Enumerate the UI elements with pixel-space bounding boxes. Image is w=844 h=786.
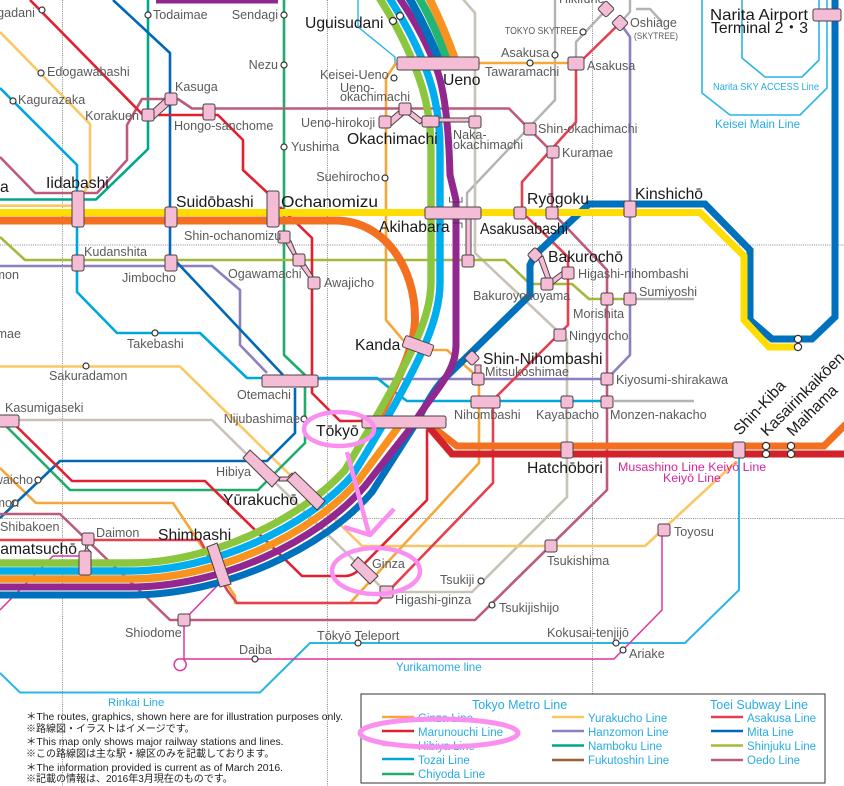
Akihabara connector ticks — [450, 197, 462, 228]
curved bundle: Tsukuba purple — [0, 0, 456, 587]
small station labels: okachimachi — [453, 138, 523, 152]
coloured line names: Yurikamome line — [396, 661, 482, 674]
small station labels: Tsukiji — [440, 573, 474, 587]
small station labels: Keisei-Ueno — [320, 68, 389, 82]
small station labels: Sakuradamon — [49, 369, 127, 383]
hand-drawn highlight: Marunouchi legend circle — [360, 719, 518, 747]
small station labels: Oshiage — [630, 16, 677, 30]
line: Ginza — [0, 63, 576, 603]
major station labels: Ueno — [443, 72, 481, 89]
small station labels: Kuramae — [562, 146, 613, 160]
major station labels: Akihabara — [379, 219, 450, 236]
coloured line names: Keisei Main Line — [715, 118, 800, 131]
line: Yurikamome — [0, 530, 662, 671]
major station labels: Yūrakuchō — [223, 492, 298, 509]
line: Asakusa — [0, 23, 620, 603]
small station labels: Daimon — [96, 526, 139, 540]
major station labels — [0, 7, 844, 558]
small station labels: Higashi-ginza — [395, 593, 471, 607]
line: Tozai — [0, 88, 607, 401]
legend labels: Ginza Line — [418, 713, 473, 725]
disclaimer notes — [26, 712, 343, 785]
small station labels: Ariake — [629, 647, 665, 661]
hand-drawn highlight: Tokyo circle — [304, 412, 374, 446]
major station labels: Tōkyō — [316, 423, 359, 440]
major station labels: Okachimachi — [347, 131, 438, 148]
major station labels: Kinshichō — [635, 186, 703, 203]
small station labels: Ginza — [372, 557, 405, 571]
small station labels: okachimachi — [340, 90, 410, 104]
line: Keisei Main outer loop — [702, 0, 827, 115]
coloured line names — [108, 81, 819, 709]
small station labels: Tsukishima — [547, 554, 609, 568]
small station labels: Naka- — [453, 128, 487, 142]
legend labels: Hibiya Line — [418, 741, 475, 753]
major station labels: Shimbashi — [158, 527, 231, 544]
small station labels: Nezu — [249, 58, 278, 72]
minor station circles — [10, 7, 802, 662]
small station labels: Hongo-sanchome — [174, 119, 273, 133]
line: Hanzomon — [0, 23, 630, 379]
line: Keiyo red — [427, 425, 844, 454]
line: Chuo orange — [0, 220, 415, 420]
major station labels: Shin-Kiba — [730, 377, 790, 439]
major station labels: a — [0, 179, 9, 196]
small station labels: Bakuroyokoyama — [473, 289, 570, 303]
station markers — [0, 1, 841, 626]
line: Hibiya — [10, 0, 567, 592]
legend labels: Marunouchi Line — [418, 727, 503, 739]
coloured line names: Musashino Line Keiyō Line — [618, 460, 766, 474]
small station labels: Nihombashi — [454, 408, 520, 422]
line: Marunouchi — [5, 0, 427, 576]
small station labels: Ueno- — [340, 81, 374, 95]
small station labels: Yushima — [291, 140, 339, 154]
line: Shinjuku — [0, 237, 630, 299]
top purple bar — [156, 0, 278, 4]
north bundle: orange — [428, 0, 456, 62]
small station labels: Kiyosumi-shirakawa — [616, 373, 728, 387]
coloured line names: Keiyō Line — [663, 471, 721, 485]
legend panel — [361, 694, 825, 783]
legend labels: Fukutoshin Line — [588, 755, 669, 767]
legend labels: Namboku Line — [588, 741, 662, 753]
small station labels: Tōkyō Teleport — [317, 629, 400, 643]
small station labels: Korakuen — [85, 109, 139, 123]
north bundle: blue — [408, 0, 440, 62]
line: Musashino orange — [434, 424, 844, 446]
small station labels — [0, 0, 728, 661]
legend labels: Hanzomon Line — [588, 727, 669, 739]
major station labels: Iidabashi — [46, 175, 109, 192]
hand-drawn arrow: Tokyo to Ginza — [344, 452, 394, 535]
legend labels: Shinjuku Line — [747, 741, 816, 753]
small station labels: Otemachi — [237, 388, 291, 402]
disclaimer notes: ※記載の情報は、2016年3月現在のものです。 — [26, 772, 233, 785]
station links — [84, 94, 566, 552]
legend labels: Oedo Line — [747, 755, 800, 767]
legend labels: Yurakucho Line — [588, 713, 667, 725]
major station labels: Kanda — [355, 337, 401, 354]
small station labels: Tawaramachi — [485, 65, 559, 79]
small station labels: Awajicho — [324, 276, 374, 290]
line: Keisei Skyliner link — [358, 0, 395, 66]
legend labels: Chiyoda Line — [418, 769, 485, 781]
major station labels: Ochanomizu — [281, 194, 378, 211]
major station labels: Hatchōbori — [527, 460, 603, 477]
legend labels: Tozai Line — [418, 755, 470, 767]
major station labels: Shin-Nihombashi — [483, 351, 602, 368]
line: Narita Sky Access inner loop — [742, 0, 819, 77]
hand-drawn highlight: Ginza circle — [332, 548, 420, 594]
small station labels: Sumiyoshi — [639, 285, 697, 299]
small station labels: Ueno-hirokoji — [301, 116, 375, 130]
small station labels: Hibiya — [216, 465, 251, 479]
major station labels: Terminal 2・3 — [711, 20, 808, 37]
major station labels: Maihama — [784, 382, 842, 440]
major station labels: Ryōgoku — [527, 191, 589, 208]
small station labels: Toyosu — [674, 525, 714, 539]
small station labels: Jimbocho — [122, 271, 176, 285]
disclaimer notes: ※この路線図は主な駅・線区のみを記載しております。 — [26, 747, 274, 760]
major station labels: Narita Airport — [710, 7, 809, 24]
small station labels: Kasumigaseki — [5, 401, 83, 415]
line: Namboku — [0, 0, 148, 200]
small station labels: Higashi-nihombashi — [578, 267, 689, 281]
small station labels: Suehirocho — [316, 170, 380, 184]
small station labels: Kagurazaka — [18, 93, 85, 107]
disclaimer notes: ※路線図・イラストはイメージです。 — [26, 722, 195, 735]
north bundle: teal — [418, 0, 448, 62]
legend swatches — [382, 717, 743, 774]
small station labels: Edogawabashi — [47, 65, 130, 79]
small station labels: TOKYO SKYTREE — [505, 25, 578, 37]
small station labels: Shiodome — [125, 626, 182, 640]
small station labels: Tsukijishijo — [499, 601, 559, 615]
line: Yurakucho — [0, 32, 737, 546]
small station labels: Kokusai-tenjijō — [547, 626, 629, 640]
line: Mita thin — [0, 0, 295, 518]
line: Mita thick full route — [0, 0, 835, 595]
line: Rinkai — [0, 450, 739, 692]
small station labels: Shin-ochanomizu — [184, 229, 281, 243]
small station labels: Sendagi — [232, 8, 278, 22]
curved bundle: Yamanote green — [0, 0, 431, 563]
legend heading: Toei Subway Line: Toei Subway Line — [710, 698, 808, 712]
legend heading: Tokyo Metro Line: Tokyo Metro Line — [472, 698, 567, 712]
small station labels: Monzen-nakacho — [610, 408, 707, 422]
small station labels: Morishita — [573, 307, 624, 321]
curved bundle: Keihin-Tohoku cyan — [0, 0, 440, 571]
line: Tobu and other grey lines — [467, 0, 694, 401]
major station labels: Suidōbashi — [176, 194, 254, 211]
legend labels: Asakusa Line — [747, 713, 816, 725]
small station labels: Shibakoen — [0, 520, 60, 534]
line: Oedo — [0, 99, 607, 620]
major station labels: Asakusabashi — [480, 221, 568, 238]
small station labels: Nijubashimae — [224, 412, 300, 426]
small station labels: Asakusa — [501, 46, 549, 60]
coloured line names: Narita SKY ACCESS Line — [713, 81, 819, 93]
legend labels — [418, 713, 816, 781]
curved bundle: orange — [0, 418, 405, 579]
small station labels: Kudanshita — [84, 245, 147, 259]
disclaimer notes: ＊The information provided is current as of March 2016. — [26, 763, 283, 774]
small station labels: Mitsukoshimae — [485, 365, 569, 379]
small station labels: Ogawamachi — [228, 267, 302, 281]
small station labels: Kayabacho — [536, 408, 599, 422]
line: Sobu yellow — [0, 212, 798, 347]
small station labels: Asakusa — [587, 59, 635, 73]
small station labels: Todaimae — [153, 8, 208, 22]
legend labels: Mita Line — [747, 727, 794, 739]
coloured line names: Rinkai Line — [108, 697, 164, 709]
major station labels: Bakurochō — [548, 249, 623, 266]
line: Chiyoda — [0, 0, 305, 490]
major station labels: Uguisudani — [305, 15, 384, 32]
small station labels: Kasuga — [175, 80, 218, 94]
disclaimer notes: ＊The routes, graphics, shown here are for illustration purposes only. — [26, 712, 343, 723]
small station labels: Daiba — [239, 643, 272, 657]
disclaimer notes: ＊This map only shows major railway stations and lines. — [26, 737, 284, 748]
small station labels: Takebashi — [127, 337, 184, 351]
small station labels: (SKYTREE) — [634, 31, 678, 42]
small station labels: Ningyocho — [569, 329, 629, 343]
small station labels: Shin-okachimachi — [538, 122, 637, 136]
